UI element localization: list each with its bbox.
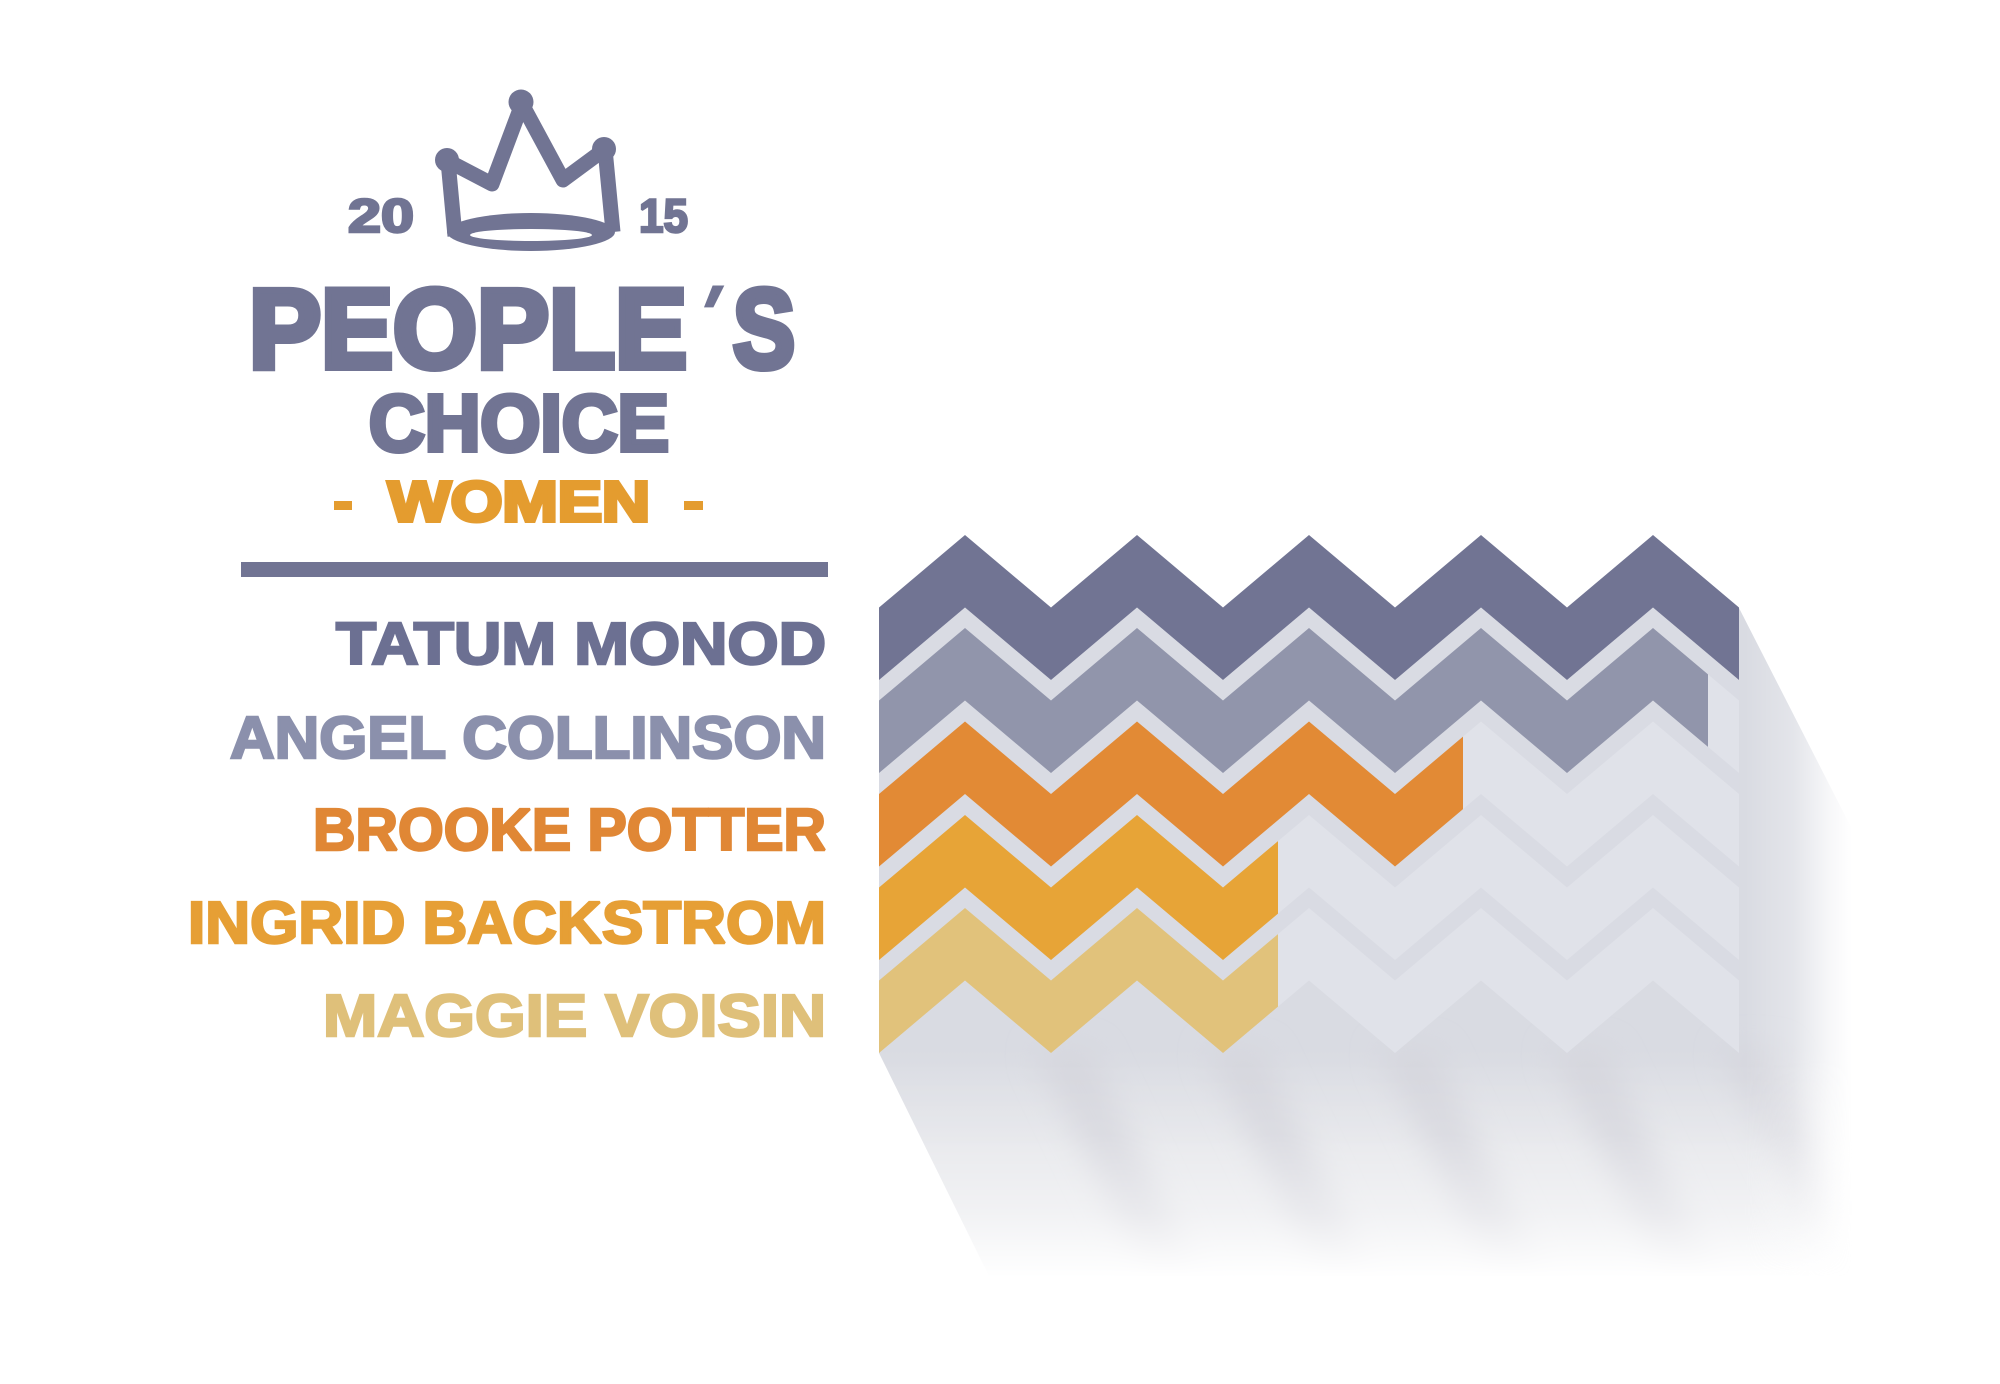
band: Tatum Monod xyxy=(879,535,1739,680)
subtitle: Women: WOMEN xyxy=(388,470,650,534)
chevron chart xyxy=(879,535,1739,1053)
crown xyxy=(435,90,616,251)
title: People's: ' xyxy=(673,266,738,365)
divider rule xyxy=(241,562,828,577)
subtitle: Women xyxy=(334,470,703,534)
name: Angel Collinson: ANGEL COLLINSON xyxy=(230,705,826,771)
infographic: People's Choice Women 2015 xyxy=(190,90,1830,1252)
name: Maggie Voisin: MAGGIE VOISIN xyxy=(323,983,826,1049)
title: Choice: CHOICE xyxy=(369,378,669,468)
crown icon with year xyxy=(348,90,688,251)
year 20: 20 xyxy=(348,189,414,242)
ranked names list xyxy=(188,611,826,1049)
title: People's: PEOPLE xyxy=(249,266,687,392)
year 15: 15 xyxy=(639,189,688,242)
name: Ingrid Backstrom: INGRID BACKSTROM xyxy=(188,890,826,956)
name: Brooke Potter: BROOKE POTTER xyxy=(313,797,826,863)
band: Maggie Voisin xyxy=(879,908,1278,1053)
band: Brooke Potter xyxy=(879,722,1463,866)
long drop shadow behind chart xyxy=(879,608,1830,1252)
gap colour between chevrons xyxy=(879,608,1739,1053)
band: Ingrid Backstrom xyxy=(879,815,1278,960)
empty remainder rows xyxy=(879,628,1739,1053)
title: People's: S xyxy=(733,266,795,392)
band: Angel Collinson xyxy=(879,628,1739,773)
name: Tatum Monod: TATUM MONOD xyxy=(336,611,826,677)
